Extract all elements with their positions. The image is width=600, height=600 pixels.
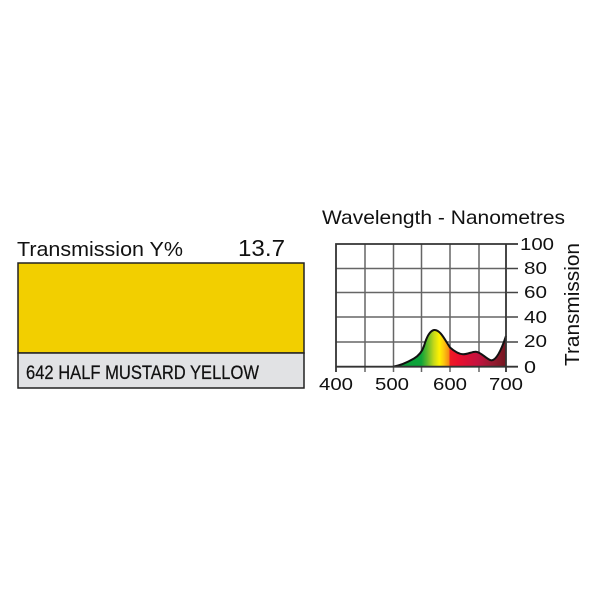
y axis labels: 40 — [524, 307, 547, 327]
chart frame — [336, 244, 518, 372]
spectral transmission chart — [319, 234, 584, 394]
y axis title: Transmission — [562, 243, 584, 366]
y axis labels: 20 — [524, 331, 547, 351]
filter name panel: 642 HALF MUSTARD YELLOW — [26, 363, 259, 384]
spectrum curve — [393, 330, 506, 367]
filter name panel — [18, 353, 304, 388]
y axis labels — [520, 234, 554, 377]
y axis labels: 100 — [520, 234, 554, 254]
x axis labels: 600 — [433, 374, 467, 394]
chart title: Wavelength - Nanometres — [322, 207, 565, 229]
colour swatch — [18, 263, 304, 353]
x axis labels: 400 — [319, 374, 353, 394]
y axis labels: 60 — [524, 282, 547, 302]
x axis labels — [319, 374, 523, 394]
y axis labels: 80 — [524, 258, 547, 278]
value: transmission percentage: 13.7 — [238, 235, 285, 261]
heading: transmission label: Transmission Y% — [17, 238, 183, 261]
x axis labels: 700 — [489, 374, 523, 394]
x axis labels: 500 — [375, 374, 409, 394]
y axis labels: 0 — [524, 357, 536, 377]
